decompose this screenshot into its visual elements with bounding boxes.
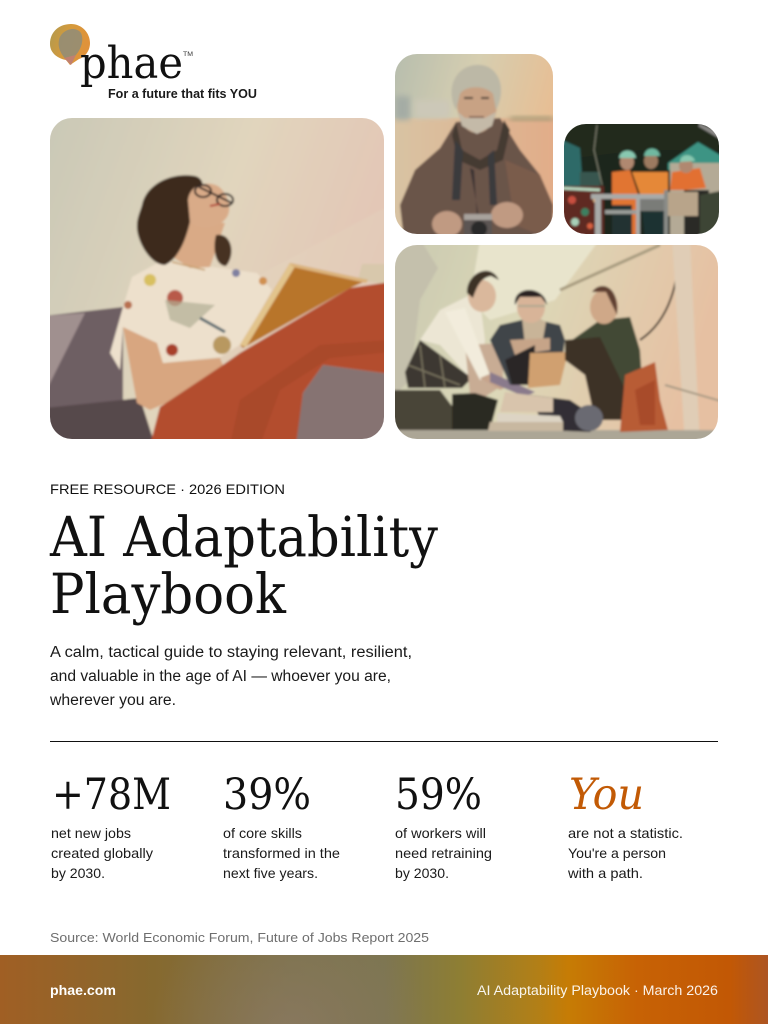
footer website: phae.com <box>50 983 116 998</box>
photo: three workers in hi-vis on a lift at night <box>564 124 719 234</box>
stat: +78M: created globally <box>51 845 153 861</box>
icon: phae logo mark <box>50 24 90 65</box>
footer document name: AI Adaptability Playbook · March 2026 <box>477 983 718 998</box>
stat: 39%: transformed in the <box>223 845 340 861</box>
stat: 59%: by 2030. <box>395 865 449 881</box>
eyebrow: FREE RESOURCE · 2026 EDITION <box>50 481 285 497</box>
trademark: TM <box>183 51 193 58</box>
stat: You: You're a person <box>568 845 666 861</box>
stat: 59% <box>395 770 492 881</box>
source note: Source: World Economic Forum, Future of Jobs Report 2025 <box>50 930 429 945</box>
title: Playbook <box>50 562 287 626</box>
stat: 39% <box>223 770 340 881</box>
stat: 39%: of core skills <box>223 825 302 841</box>
stat: +78M <box>51 770 171 881</box>
stat: +78M: net new jobs <box>51 825 131 841</box>
logo <box>50 24 257 101</box>
stat: You: are not a statistic. <box>568 825 683 841</box>
footer band <box>0 955 768 1024</box>
stat: You: You <box>569 770 644 820</box>
stat: 59%: of workers will <box>395 825 486 841</box>
stat: +78M: by 2030. <box>51 865 105 881</box>
tagline: For a future that fits YOU <box>108 87 257 101</box>
title <box>49 505 438 626</box>
photo: three students sitting on stairs with books <box>389 239 724 445</box>
stat: 39%: 39% <box>223 770 311 820</box>
stat: +78M: +78M <box>52 770 171 820</box>
stat: You <box>567 770 683 881</box>
wordmark: phae <box>80 38 183 89</box>
description: and valuable in the age of AI — whoever you are, <box>50 668 391 685</box>
title: AI Adaptability <box>49 505 438 569</box>
photo: older man holding a camera <box>395 54 553 234</box>
description: wherever you are. <box>49 692 176 709</box>
stat: 39%: next five years. <box>223 865 318 881</box>
description <box>49 644 412 709</box>
stat: 59%: 59% <box>395 770 482 820</box>
photo: woman reading on a sofa <box>44 112 390 445</box>
description: A calm, tactical guide to staying relevant, resilient, <box>50 644 412 661</box>
stat: 59%: need retraining <box>395 845 492 861</box>
stat: You: with a path. <box>567 865 643 881</box>
